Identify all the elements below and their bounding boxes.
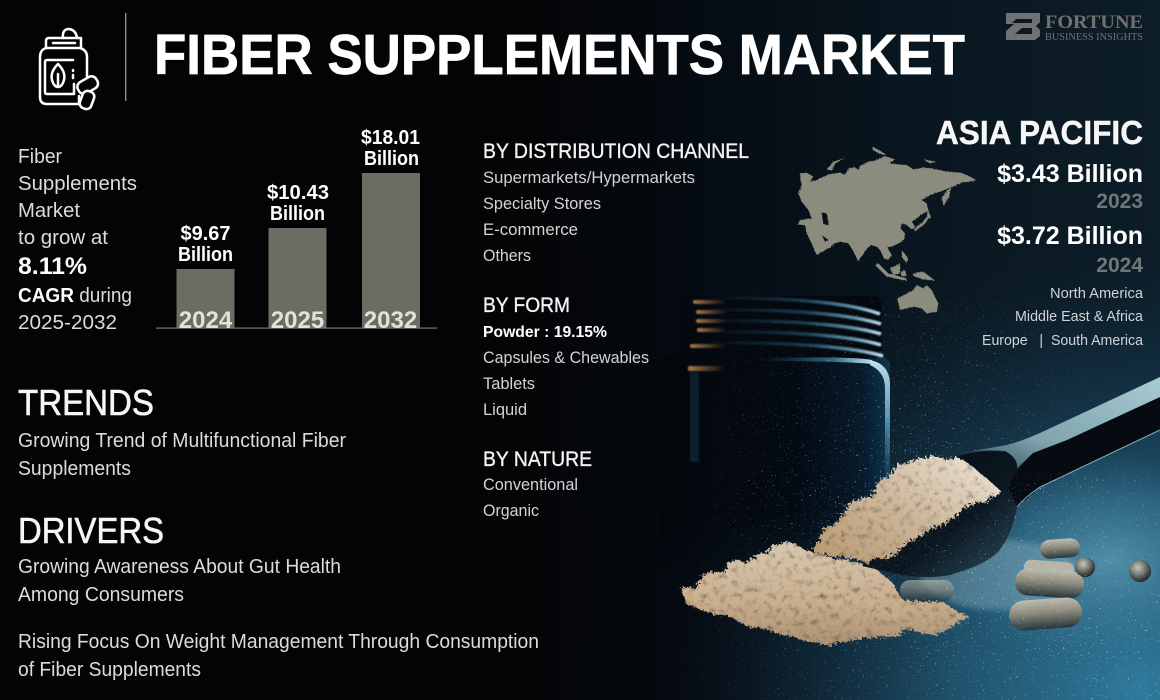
trends: Growing Trend of Multifunctional Fiber xyxy=(18,430,346,452)
bar chart: market size: $9.67 xyxy=(180,223,230,245)
floor sparkle xyxy=(640,470,1160,700)
drivers: DRIVERS xyxy=(18,510,164,551)
CAGR text block: Supplements xyxy=(18,173,137,195)
region: Asia Pacific values: $3.43 Billion xyxy=(997,160,1143,188)
segment: by distribution channel: Others xyxy=(483,246,531,265)
CAGR text block xyxy=(18,146,137,334)
segment: by nature: Organic xyxy=(483,501,539,520)
bar chart: market size: Billion xyxy=(270,203,325,225)
powder in spoon xyxy=(813,457,1000,564)
divider xyxy=(125,13,126,101)
drivers: of Fiber Supplements xyxy=(18,659,201,681)
floating dust xyxy=(678,300,1121,658)
bar chart: market size: $18.01 xyxy=(361,127,420,149)
segment: by distribution channel xyxy=(483,140,749,265)
segment: by form: Capsules & Chewables xyxy=(483,348,649,367)
segment: by nature xyxy=(483,448,592,520)
trends: TRENDS xyxy=(18,382,154,423)
trends xyxy=(18,382,346,480)
spoon bowl xyxy=(862,451,1018,577)
segment: by form xyxy=(483,294,649,419)
region: Asia Pacific values: 2024 xyxy=(1096,254,1143,277)
CAGR text block: Fiber xyxy=(18,146,62,168)
other regions xyxy=(982,285,1144,349)
region: Asia Pacific values xyxy=(936,114,1143,277)
segment: by form: Powder : 19.15% xyxy=(483,324,607,341)
CAGR text block: CAGR during xyxy=(18,285,132,307)
region: Asia Pacific values: 2023 xyxy=(1096,190,1143,213)
drivers xyxy=(18,510,539,681)
segment: by nature: BY NATURE xyxy=(483,448,592,471)
powder pile xyxy=(683,542,970,645)
bar chart: market size: Billion xyxy=(178,244,233,266)
bar chart: market size: 2024 xyxy=(179,307,233,334)
segment: by distribution channel: E-commerce xyxy=(483,220,578,239)
bar chart: market size: 2032 xyxy=(364,307,417,334)
bar chart: market size: 2025 xyxy=(271,307,324,334)
CAGR text block: 8.11% xyxy=(18,253,87,280)
icon: supplement jar with leaf and capsules xyxy=(40,29,100,111)
jar xyxy=(687,296,890,553)
logo: Fortune Business Insights: BUSINESS INSIGHTS xyxy=(1045,32,1143,43)
capsules xyxy=(1008,538,1151,631)
map: Asia Pacific xyxy=(797,147,977,313)
bar chart: market size: Billion xyxy=(364,148,419,170)
region: Asia Pacific values: $3.72 Billion xyxy=(997,222,1143,250)
other regions: Middle East & Africa xyxy=(1015,308,1144,325)
logo: Fortune Business Insights: FORTUNE xyxy=(1045,12,1143,33)
drivers: Among Consumers xyxy=(18,584,184,606)
segment: by form: BY FORM xyxy=(483,294,570,317)
segment: by distribution channel: BY DISTRIBUTION CHANNEL xyxy=(483,140,749,163)
segment: by distribution channel: Specialty Stores xyxy=(483,194,601,213)
title: FIBER SUPPLEMENTS MARKET xyxy=(154,23,965,87)
segment: by nature: Conventional xyxy=(483,475,578,494)
CAGR text block: to grow at xyxy=(18,227,108,249)
logo: Fortune Business Insights xyxy=(1006,12,1143,43)
drivers: Rising Focus On Weight Management Through Consumption xyxy=(18,631,539,653)
other regions: Europe | South America xyxy=(982,332,1144,349)
CAGR text block: 2025-2032 xyxy=(18,312,117,334)
bar chart: market size xyxy=(156,127,437,334)
CAGR text block: Market xyxy=(18,200,80,222)
trends: Supplements xyxy=(18,458,131,480)
bar chart: market size: $10.43 xyxy=(267,182,329,204)
other regions: North America xyxy=(1050,285,1144,302)
drivers: Growing Awareness About Gut Health xyxy=(18,556,341,578)
capsule under spoon xyxy=(900,580,954,601)
segment: by form: Liquid xyxy=(483,400,527,419)
background photo: supplement jar, spoon, powder and capsules xyxy=(644,0,1160,700)
spoon handle xyxy=(960,377,1160,507)
segment: by distribution channel: Supermarkets/Hypermarkets xyxy=(483,168,695,187)
region: Asia Pacific values: ASIA PACIFIC xyxy=(936,114,1143,151)
segment: by form: Tablets xyxy=(483,374,535,393)
